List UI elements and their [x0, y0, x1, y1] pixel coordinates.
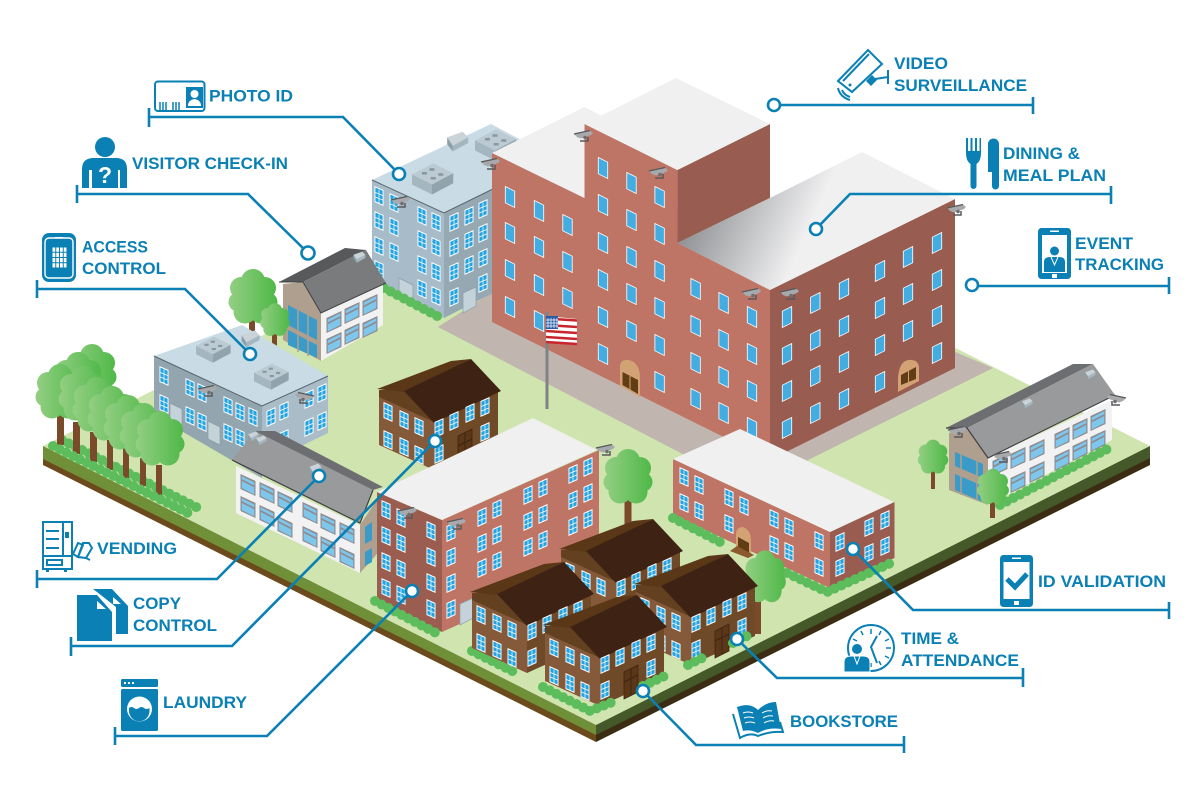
building: blue-grey dormitory	[372, 124, 540, 318]
building: main brick residence hall	[481, 78, 966, 460]
icon: phone with check mark	[1000, 555, 1033, 607]
callout: copy control: CONTROL	[133, 617, 217, 635]
building: brick laundry hall	[375, 418, 615, 634]
icon: fork and knife	[966, 138, 999, 190]
icon: visitor with question mark	[82, 137, 127, 188]
trees near east block	[918, 440, 1009, 518]
icon: vending machine	[43, 522, 92, 571]
callout: bookstore: BOOKSTORE	[790, 713, 898, 731]
tree row and hedge on west edge	[36, 344, 198, 514]
callout: laundry	[115, 585, 418, 745]
ground platform	[43, 167, 1150, 742]
callout: photo ID: PHOTO ID	[209, 88, 293, 106]
icon: visitor with question mark: ?	[98, 162, 112, 188]
callout: time and attendance	[731, 625, 1023, 687]
callout: dining and meal plan: DINING &	[1003, 145, 1080, 163]
icon: washing machine	[121, 679, 158, 731]
building: grey access control block	[154, 325, 328, 478]
callout: laundry: LAUNDRY	[163, 694, 247, 712]
callout: video surveillance: SURVEILLANCE	[894, 77, 1027, 95]
callout: visitor check-in	[77, 137, 314, 260]
icon: copied documents	[77, 589, 128, 641]
callout: event tracking: TRACKING	[1075, 256, 1164, 274]
callout: visitor check-in: VISITOR CHECK-IN	[132, 155, 288, 173]
building: long gable block	[232, 431, 385, 573]
callout: vending: VENDING	[97, 540, 177, 558]
building: low brick hall	[673, 429, 894, 592]
icon: clock and person	[844, 625, 894, 672]
callout: access control: ACCESS	[82, 238, 148, 256]
side facade windows	[782, 232, 942, 438]
flag pole and American flag	[546, 312, 577, 409]
callout: bookstore	[637, 685, 904, 753]
building: visitor gable house	[279, 248, 386, 361]
trees behind access building	[228, 269, 290, 352]
callout: ID validation	[847, 543, 1169, 619]
arched doors	[620, 360, 919, 397]
icon: ID card	[155, 82, 204, 111]
callout: access control	[37, 233, 256, 360]
callout: dining and meal plan: MEAL PLAN	[1003, 167, 1106, 185]
building: small brown house	[377, 359, 501, 470]
callout: time and attendance: TIME &	[901, 630, 959, 648]
icon: phone with attendee	[1038, 228, 1071, 279]
building: east gable block	[946, 364, 1126, 505]
callout: ID validation: ID VALIDATION	[1038, 573, 1166, 591]
icon: open book	[733, 702, 783, 738]
callout: dining and meal plan	[810, 138, 1111, 235]
tree beside brown houses	[744, 550, 786, 634]
callout: video surveillance	[768, 50, 1033, 114]
icon: security camera	[838, 50, 888, 100]
paved forecourt	[438, 210, 993, 489]
callout: photo ID	[149, 82, 405, 180]
callout: event tracking: EVENT	[1075, 235, 1133, 253]
front facade windows	[505, 158, 757, 438]
callout: access control: CONTROL	[82, 260, 166, 278]
callout: event tracking	[966, 228, 1169, 294]
cluster of brown houses	[470, 519, 758, 711]
callout: vending	[37, 470, 325, 588]
callout: video surveillance: VIDEO	[894, 55, 948, 73]
callout: copy control: COPY	[133, 595, 181, 613]
icon: keypad device	[42, 233, 76, 282]
callout: time and attendance: ATTENDANCE	[901, 652, 1019, 670]
tree behind laundry hall	[604, 449, 652, 525]
callout: copy control	[71, 435, 441, 656]
